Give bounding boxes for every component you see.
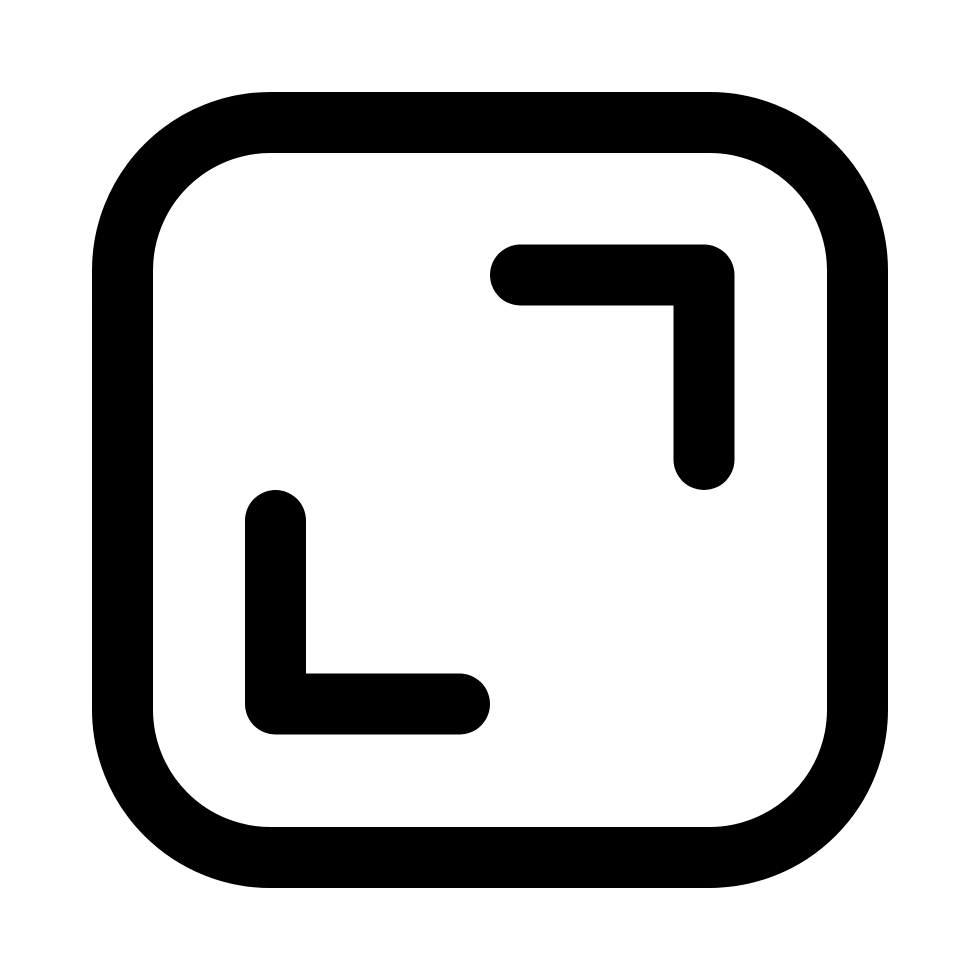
icon: bottom-left corner arrow [276, 520, 460, 704]
icon: rounded square outline [122, 122, 858, 858]
icon: top-right corner arrow [520, 275, 704, 460]
